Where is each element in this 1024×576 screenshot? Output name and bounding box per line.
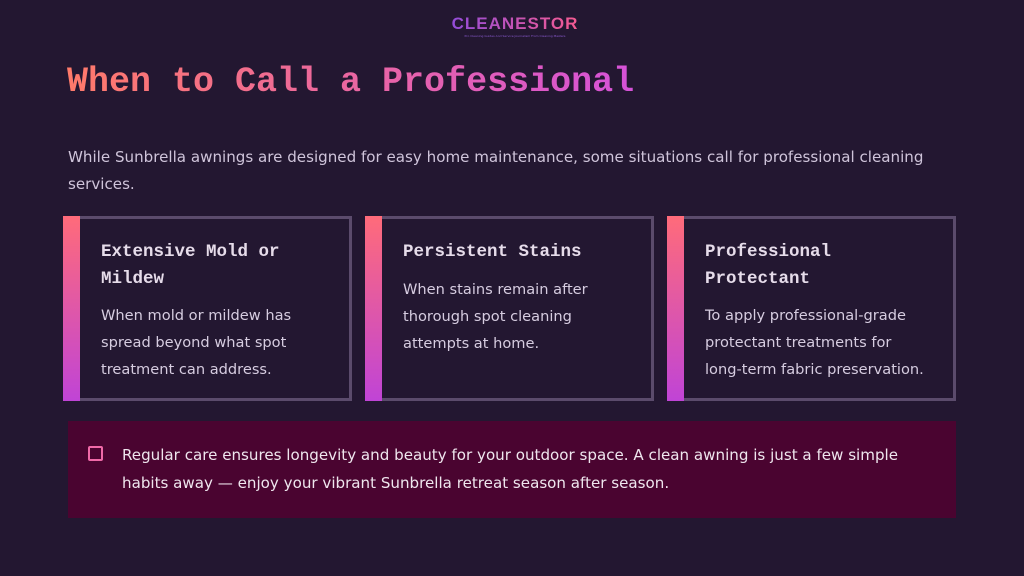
panel: mold: spread beyond what spot — [101, 334, 286, 351]
panel: stains: thorough spot cleaning — [403, 308, 572, 325]
panel: stains — [365, 216, 654, 401]
panel: stains: attempts at home. — [403, 335, 539, 352]
panel: stains: When stains remain after — [403, 281, 588, 298]
callout: Regular care ensures longevity and beauty for your outdoor space. A clean awning is just a few simple habits away — enjoy your vibrant Sunbrella retreat season after season. — [122, 446, 898, 492]
panel: mold: treatment can address. — [101, 361, 272, 378]
icon: note — [88, 446, 103, 461]
panel: protectant: Professional — [705, 242, 831, 262]
title: When to Call a Professional — [67, 62, 634, 102]
logo: CLEANESTOR — [452, 14, 578, 33]
callout — [68, 421, 956, 518]
panel: protectant: Protectant — [705, 269, 810, 289]
panel: protectant: protectant treatments for — [705, 334, 891, 351]
panel: mold: When mold or mildew has — [101, 307, 291, 324]
intro text: While Sunbrella awnings are designed for easy home maintenance, some situations call for professional cleaning services. — [68, 148, 923, 193]
panel: stains: Persistent Stains — [403, 242, 582, 262]
logo: Pro Cleaning Guides And Service Journalism From Cleaning Masters — [465, 34, 565, 38]
panel: mold: Mildew — [101, 269, 164, 289]
panel: mold — [63, 216, 352, 401]
panel: protectant: To apply professional-grade — [705, 307, 906, 324]
panel: protectant — [667, 216, 956, 401]
panel: protectant: long-term fabric preservation. — [705, 361, 924, 378]
panel: mold: Extensive Mold or — [101, 242, 280, 262]
